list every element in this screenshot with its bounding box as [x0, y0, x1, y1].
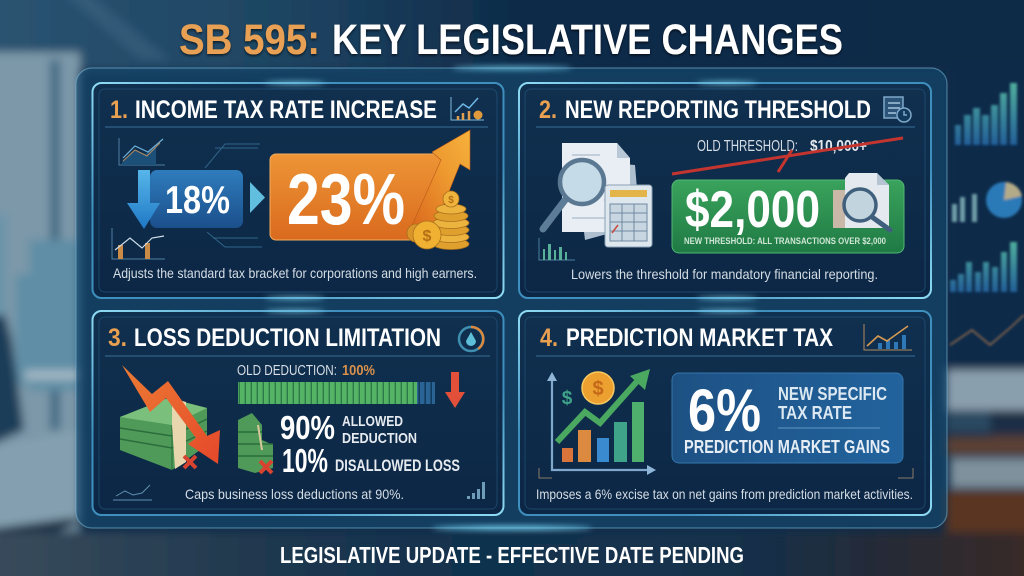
10 percent disallowed: DISALLOWED LOSS [335, 456, 460, 475]
arrow between rates [250, 182, 265, 213]
title: SB 595: [179, 16, 320, 64]
old deduction label: OLD DEDUCTION: [237, 363, 337, 379]
icon: ring with drop [459, 327, 483, 351]
icon: trend chart [864, 324, 912, 350]
connector lines [205, 144, 262, 247]
heading 1: INCOME TAX RATE INCREASE [135, 96, 437, 124]
new threshold box: NEW THRESHOLD: ALL TRANSACTIONS OVER $2,000 [684, 236, 886, 246]
outer glass frame [76, 66, 947, 530]
old threshold: $10,000+ [810, 138, 867, 155]
icon: document with clock [884, 97, 911, 122]
old threshold: OLD THRESHOLD: [697, 138, 798, 155]
icon: document magnifier [833, 173, 890, 230]
old rate box 18% [150, 170, 243, 228]
illustration: growth chart with coin: $ [562, 388, 573, 409]
heading 1: 1. [110, 96, 128, 124]
description 1: Adjusts the standard tax bracket for corporations and high earners. [113, 265, 477, 281]
panel 3: loss deduction limitation [92, 310, 504, 515]
icon: red down arrow [445, 372, 465, 408]
panel 1: income tax rate increase [92, 82, 504, 299]
title: KEY LEGISLATIVE CHANGES [332, 16, 843, 64]
icon: coin stack: $ [448, 195, 454, 206]
rate box 6%: NEW SPECIFIC [778, 384, 887, 404]
heading 4: PREDICTION MARKET TAX [566, 324, 833, 352]
icon: mini line chart [113, 485, 152, 500]
icon: small bar chart [539, 238, 575, 260]
chart decoration bottom [112, 228, 165, 259]
old deduction label: 100% [342, 363, 375, 379]
rate box 6%: PREDICTION MARKET GAINS [684, 437, 890, 457]
icon: coin stack: $ [423, 228, 432, 245]
90 percent allowed [280, 409, 417, 447]
rate box 6%: TAX RATE [778, 403, 852, 423]
icon: coin stack [407, 191, 469, 250]
panel 2: new reporting threshold [519, 82, 931, 299]
heading 2: 2. [539, 96, 557, 124]
rate box 6% [672, 373, 903, 463]
icon: small money stack [238, 413, 273, 473]
icon: chart with coin [451, 97, 484, 120]
illustration: growth chart with coin [547, 369, 656, 475]
90 percent allowed: 90% [280, 409, 335, 446]
new threshold box [672, 180, 904, 253]
icon: rising arrow [410, 130, 470, 234]
heading 3: 3. [108, 324, 127, 352]
90 percent allowed: DEDUCTION [342, 430, 417, 447]
corner marks [539, 468, 913, 478]
illustration: money stack with falling arrow [120, 365, 220, 470]
footer: LEGISLATIVE UPDATE - EFFECTIVE DATE PENDING [280, 542, 744, 568]
illustration: documents, magnifier, calculator [543, 143, 652, 247]
90 percent allowed: ALLOWED [342, 413, 403, 430]
description 2: Lowers the threshold for mandatory financial reporting. [571, 266, 878, 282]
description 4: Imposes a 6% excise tax on net gains from prediction market activities. [536, 486, 913, 502]
new threshold box: $2,000 [685, 181, 820, 239]
description 3: Caps business loss deductions at 90%. [185, 486, 404, 502]
chart decoration top [119, 138, 165, 165]
10 percent disallowed: 10% [282, 442, 328, 479]
progress bar [238, 382, 435, 404]
heading 4: 4. [540, 324, 558, 352]
title [179, 16, 843, 64]
panel 4: prediction market tax [519, 310, 931, 515]
heading 3: LOSS DEDUCTION LIMITATION [134, 324, 441, 352]
old rate box 18%: 18% [165, 179, 230, 222]
new rate box 23%: 23% [287, 160, 405, 240]
icon: mini bars [467, 482, 485, 499]
icon: blue down arrow [127, 170, 160, 229]
rate box 6%: 6% [688, 377, 761, 444]
10 percent disallowed [282, 442, 460, 479]
illustration: growth chart with coin: $ [592, 378, 604, 400]
old threshold [672, 138, 903, 174]
heading 2: NEW REPORTING THRESHOLD [565, 96, 871, 124]
